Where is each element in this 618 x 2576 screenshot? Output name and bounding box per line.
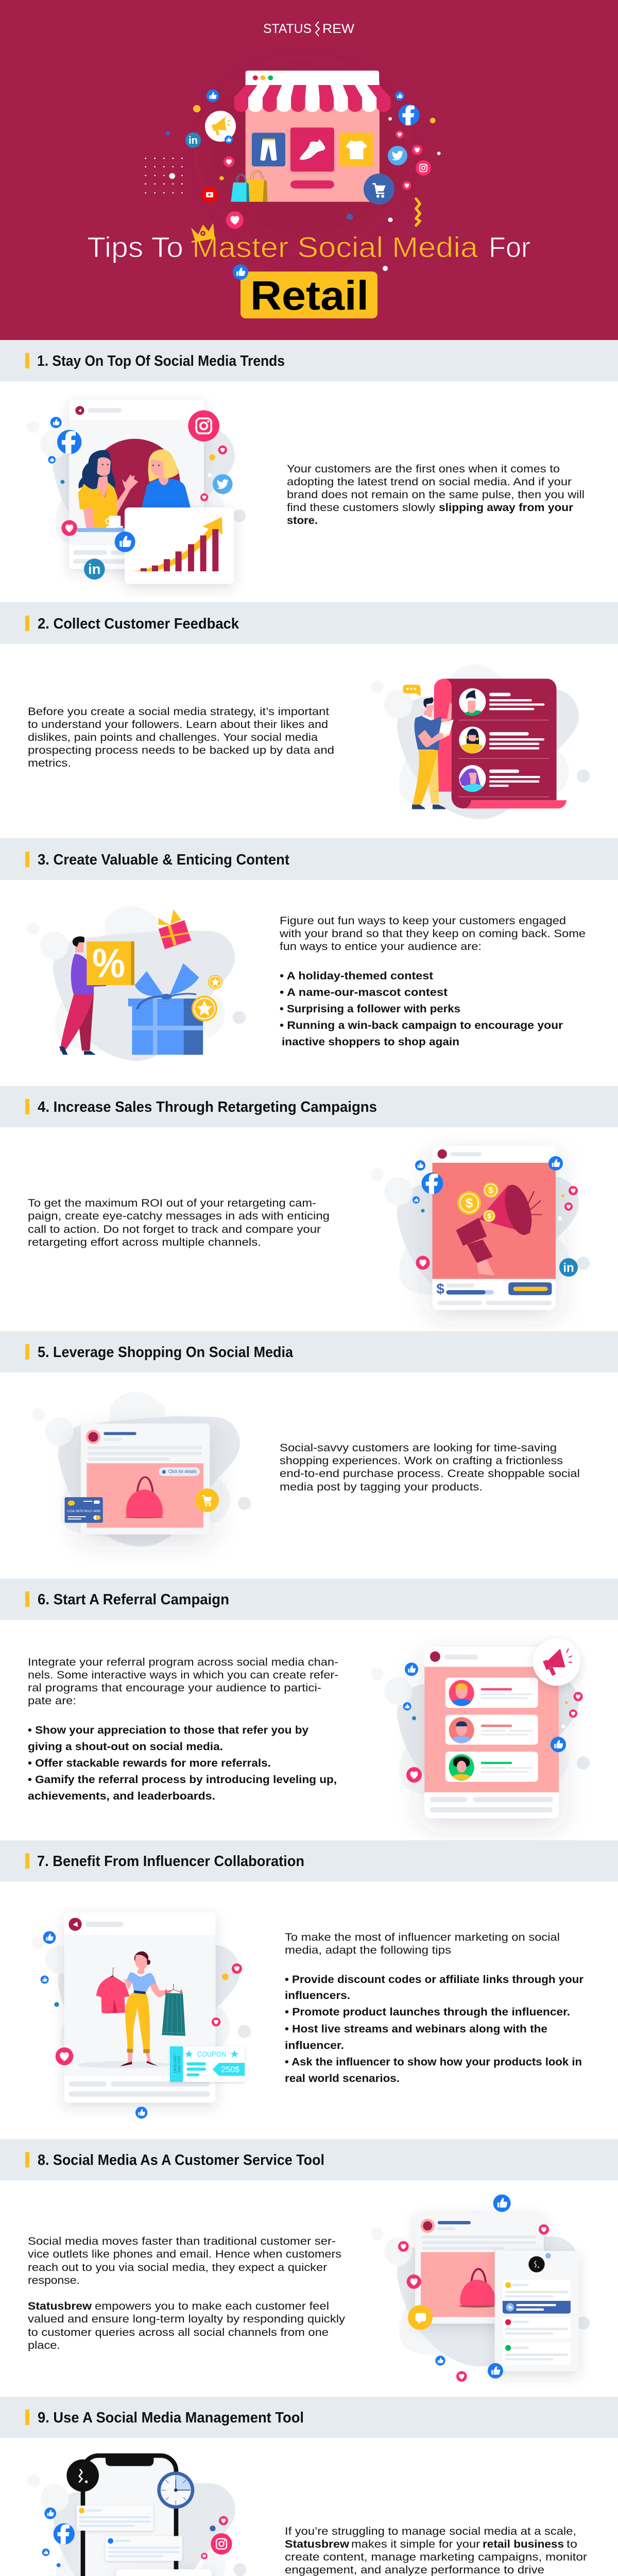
section 2 text: Before you create a social media strategy, it’s important <box>28 706 329 718</box>
illustration: section 9 blob <box>27 2459 246 2576</box>
woman right <box>142 449 191 507</box>
section 6 bullet list: achievements, and leaderboards. <box>28 1790 215 1802</box>
icon: like bottom large <box>488 2363 503 2379</box>
icon: like small <box>48 456 56 464</box>
blue dot <box>412 1716 416 1720</box>
icon: cart <box>364 174 394 205</box>
message panel 1 <box>77 2505 153 2531</box>
section 5 heading: 5. Leverage Shopping On Social Media <box>38 1344 294 1361</box>
section 7 heading: 7. Benefit From Influencer Collaboration <box>37 1853 304 1870</box>
section 2 heading: 2. Collect Customer Feedback <box>38 616 239 632</box>
yellow dot <box>565 1701 568 1704</box>
ad card <box>433 1146 556 1310</box>
percent box <box>87 941 134 985</box>
section 9 heading: 9. Use A Social Media Management Tool <box>38 2410 304 2426</box>
title: Master Social Media <box>192 231 478 263</box>
icon: facebook <box>57 430 81 454</box>
section 8 text: Social media moves faster than traditional customer ser- <box>28 2235 336 2247</box>
section 4 heading: 4. Increase Sales Through Retargeting Campaigns <box>38 1099 377 1115</box>
icon: heart right <box>219 2516 228 2526</box>
icon: facebook <box>421 1173 443 1194</box>
section 7 heading <box>0 1840 618 1882</box>
icon: facebook <box>399 104 419 126</box>
section 7 bullet list <box>285 1974 583 2084</box>
section 7 bullet list: • Host live streams and webinars along with the <box>285 2023 547 2035</box>
icon: megaphone badge <box>205 111 236 142</box>
icon: like top <box>493 2194 511 2212</box>
icon: heart large <box>56 2047 73 2065</box>
section 8 text: Statusbrew <box>28 2300 92 2312</box>
icon: like on badge <box>233 264 248 280</box>
section 1 text: brand does not remain on the same pulse, then you will <box>287 489 585 501</box>
icon: heart left large <box>407 2275 421 2289</box>
click pill <box>159 1467 200 1476</box>
section 3 heading: 3. Create Valuable & Enticing Content <box>38 852 289 868</box>
icon: heart <box>416 1256 430 1269</box>
icon: youtube <box>202 187 217 202</box>
section 1 text: adopting the latest trend on social media. And if your <box>287 476 572 488</box>
icon: linkedin <box>185 132 201 148</box>
blue dot <box>57 2563 61 2567</box>
section 9 text: If you’re struggling to manage social media at a scale, <box>285 2526 576 2537</box>
illustration: section 6 referral card <box>424 1647 559 1818</box>
icon: heart left <box>398 2241 409 2252</box>
illustration: section 1 social post and growth chart <box>48 400 234 584</box>
blue dot <box>421 1209 424 1213</box>
icon: like <box>415 1160 425 1171</box>
section 6 bullet list: • Gamify the referral process by introducing leveling up, <box>28 1774 337 1786</box>
icon: like <box>207 90 219 102</box>
illustration: section 8 blob <box>371 2212 590 2366</box>
storefront <box>145 71 441 226</box>
icon: heart bottom <box>226 211 244 229</box>
illustration: section 7 blob <box>32 1920 251 2075</box>
section 9 heading <box>0 2397 618 2438</box>
section 3 bullet list <box>280 970 563 1048</box>
product: shoe <box>290 128 334 172</box>
referral row 2 <box>445 1715 538 1744</box>
icon: heart right <box>569 1186 578 1195</box>
section 9 text <box>285 2526 587 2576</box>
icon: heart right <box>539 2224 549 2234</box>
section 3 bullet list: • Running a win-back campaign to encourage your <box>280 1020 563 1031</box>
section 8 text: empowers you to make each customer feel <box>95 2300 329 2312</box>
dot grid <box>145 158 183 193</box>
post card <box>415 2213 544 2324</box>
section 1 heading: 1. Stay On Top Of Social Media Trends <box>37 353 285 369</box>
illustration: section 2 blob <box>371 665 590 819</box>
red circle backdrop <box>89 439 180 528</box>
cup and table <box>77 516 125 532</box>
icon: dollar coin small <box>483 1210 495 1222</box>
section 4 text: call to action. Do not forget to track and compare your <box>28 1224 321 1235</box>
section 4 text <box>28 1197 330 1248</box>
dollar sign: $ <box>436 1281 444 1297</box>
section 8 text: valued and ensure long-term loyalty by responding quickly <box>28 2313 346 2325</box>
header background <box>0 0 618 340</box>
icon: twitter <box>388 146 407 165</box>
referral row 1 <box>445 1677 538 1708</box>
section 3 bullet list: inactive shoppers to shop again <box>282 1036 459 1048</box>
illustration: section 3 person with gift <box>59 909 203 1055</box>
section 7 text: To make the most of influencer marketing on social <box>285 1931 560 1943</box>
illustration: section 5 shoppable post <box>65 1423 210 1534</box>
megaphone <box>456 1183 542 1276</box>
icon: heart <box>406 1767 422 1783</box>
statusbrew badge <box>66 2460 99 2492</box>
product: t-shirt <box>340 133 373 166</box>
icon: like small <box>413 1196 420 1204</box>
illustration: section 9 phone dashboard <box>42 2455 232 2576</box>
icon: like large <box>115 532 135 552</box>
post card <box>69 400 204 569</box>
section 9 text: create content, manage marketing campaigns, monitor <box>285 2551 587 2563</box>
icon: like bottom <box>435 2355 445 2366</box>
illustration: section 7 influencer post <box>41 1912 245 2119</box>
statusbrew logo: REW <box>322 22 354 36</box>
chart card <box>125 507 234 584</box>
icon: like small <box>42 2549 49 2556</box>
teal skirt on hanger <box>162 1985 185 2036</box>
bar chart panel <box>116 2569 212 2576</box>
section 4 text: To get the maximum ROI out of your retargeting cam- <box>28 1197 316 1209</box>
illustration: section 4 ad card <box>433 1146 556 1310</box>
section 2 text <box>28 706 334 769</box>
icon: facebook <box>54 2523 75 2545</box>
person <box>59 936 107 1055</box>
post card <box>64 1912 215 2103</box>
icon: like small <box>395 91 404 100</box>
section 6 bullet list: giving a shout-out on social media. <box>28 1741 223 1753</box>
icon: like small <box>41 1975 49 1984</box>
section 7 bullet list: • Promote product launches through the influencer. <box>285 2006 570 2018</box>
section 6 text: nels. Some interactive ways in which you can create refer- <box>28 1669 338 1681</box>
coupon: 250$ <box>221 2065 239 2074</box>
section 5 text <box>280 1442 580 1493</box>
section 6 bullet list: • Show your appreciation to those that refer you by <box>28 1724 308 1736</box>
section 6 text: ral programs that encourage your audience to partici- <box>28 1682 321 1694</box>
icon: linkedin: in <box>563 1261 574 1275</box>
icon: heart right <box>218 446 227 454</box>
section 3 text: with your brand so that they keep on coming back. Some <box>279 928 586 940</box>
icon: star coin large <box>192 995 217 1021</box>
illustration: section 2 feedback scroll with person <box>403 679 566 809</box>
section 9 text: Statusbrew <box>285 2538 350 2550</box>
icon: like right <box>551 1737 566 1752</box>
blue dot right <box>210 2526 216 2531</box>
buy button <box>290 180 334 189</box>
section 9 text: makes it simple for your <box>351 2538 480 2550</box>
shopping bags <box>231 171 268 202</box>
illustration: section 6 blob <box>371 1652 590 1806</box>
credit card <box>65 1497 103 1523</box>
clock <box>157 2471 194 2509</box>
section 9 text: retail business <box>483 2538 564 2550</box>
icon: dollar coin small: $ <box>487 1212 491 1220</box>
section 7 bullet list: real world scenarios. <box>285 2073 400 2084</box>
message panel 2 <box>106 2536 182 2561</box>
section 3 heading <box>0 838 618 880</box>
section 8 text: reach out to you via social media, they expect a quicker <box>28 2262 327 2274</box>
title <box>87 231 530 263</box>
section 4 heading <box>0 1086 618 1127</box>
section 4 text: paign, create eye-catchy messages in ads with enticing <box>28 1210 330 1222</box>
section 2 text: metrics. <box>28 757 71 769</box>
phone <box>83 2455 176 2576</box>
icon: heart right <box>412 145 422 155</box>
icon: instagram <box>188 410 219 442</box>
section 2 text: prospecting process needs to be backed up by data and <box>28 744 334 756</box>
white dot <box>217 2575 220 2576</box>
section 3 text: fun ways to entice your audience are: <box>280 941 482 953</box>
section 8 text: place. <box>28 2340 60 2351</box>
title: For <box>489 231 530 263</box>
icon: instagram <box>211 2533 232 2554</box>
icon: dollar coin large: $ <box>466 1195 473 1211</box>
icon: like on megaphone <box>225 135 233 144</box>
illustration: section 8 customer service cards <box>398 2194 579 2382</box>
section 8 heading <box>0 2139 618 2180</box>
section 7 bullet list: influencer. <box>285 2040 344 2052</box>
avatar 2 <box>459 726 486 754</box>
section 8 heading: 8. Social Media As A Customer Service Tool <box>38 2152 324 2168</box>
title: Tips To <box>87 231 183 263</box>
icon: heart right lower <box>403 181 411 190</box>
illustration: section 5 blob <box>32 1392 251 1547</box>
icon: heart small <box>201 2553 208 2560</box>
section 5 text: shopping experiences. Work on crafting a frictionless <box>280 1455 563 1467</box>
section 3 text: Figure out fun ways to keep your customers engaged <box>280 915 566 927</box>
illustration: section 3 blob <box>27 906 246 1061</box>
illustration: section 4 blob <box>371 1152 590 1307</box>
section 2 text: dislikes, pain points and challenges. Your social media <box>28 732 318 743</box>
icon: chat bubble <box>408 2305 433 2330</box>
blue dot <box>54 2002 59 2007</box>
click for details label: Click for details <box>168 1469 197 1474</box>
section 7 bullet list: • Ask the influencer to show how your products look in <box>285 2056 582 2068</box>
small dots <box>166 105 441 222</box>
section 6 heading: 6. Start A Referral Campaign <box>38 1591 229 1608</box>
red shirt on hanger <box>96 1968 130 2013</box>
post card <box>81 1423 210 1534</box>
white dot <box>561 1724 565 1728</box>
white dot <box>383 266 388 271</box>
icon: like <box>44 2507 56 2519</box>
percent sign: % <box>92 940 125 986</box>
icon: heart right <box>232 1963 242 1974</box>
section 9 text: to <box>566 2538 577 2550</box>
referral row 3 <box>445 1752 538 1782</box>
section 5 text: media post by tagging your products. <box>280 1481 483 1493</box>
blue dot <box>60 480 64 484</box>
white dot <box>558 1216 562 1221</box>
icon: like <box>50 417 62 428</box>
section 6 text <box>28 1656 338 1707</box>
section 5 text: end-to-end purchase process. Create shoppable social <box>280 1468 580 1480</box>
section 1 text: find these customers slowly <box>287 502 436 514</box>
woman left <box>78 450 138 528</box>
icon: dollar coin medium <box>483 1182 499 1198</box>
section 3 bullet list: • Surprising a follower with perks <box>280 1003 460 1015</box>
icon: crown <box>191 223 215 243</box>
icon: linkedin: in <box>88 561 100 577</box>
section 7 text: media, adapt the following tips <box>285 1944 451 1956</box>
card number: 1234 5678 9012 3456 <box>67 1510 100 1513</box>
icon: heart left <box>224 157 234 167</box>
section 6 heading <box>0 1579 618 1620</box>
section 8 text: to customer queries across all social channels from one <box>28 2327 329 2338</box>
yellow dot <box>222 1974 229 1980</box>
section 2 heading <box>0 602 618 644</box>
section 7 bullet list: influencers. <box>285 1990 350 2002</box>
product: jeans <box>252 133 285 166</box>
section 1 text: Your customers are the first ones when it comes to <box>287 463 560 475</box>
coupon: COUPON <box>197 2050 226 2059</box>
large gift <box>128 963 203 1055</box>
referral card <box>424 1647 559 1818</box>
inbox card <box>495 2251 579 2371</box>
influencer woman <box>121 1952 171 2066</box>
section 5 heading <box>0 1331 618 1372</box>
section 7 text <box>285 1931 560 1956</box>
icon: cart coin <box>195 1488 219 1512</box>
section 8 text <box>28 2235 346 2351</box>
section 1 text: slipping away from your <box>439 502 573 514</box>
statusbrew logo: STATUS <box>263 22 312 36</box>
section 4 text: retargeting effort across multiple channels. <box>28 1236 261 1248</box>
person with clipboard <box>412 697 454 809</box>
icon: heart small <box>569 1709 577 1718</box>
icon: twitter <box>213 474 233 494</box>
icon: instagram <box>416 160 431 176</box>
section 9 text: engagement, and analyze performance to drive <box>285 2564 544 2576</box>
coupon <box>170 2046 245 2082</box>
small gift <box>159 909 191 949</box>
handbag <box>125 1477 164 1518</box>
icon: star coin small <box>208 975 222 989</box>
avatar 3 <box>459 765 486 792</box>
icon: like right <box>548 1156 563 1171</box>
speech bubble <box>403 685 421 697</box>
icon: heart small <box>564 1202 573 1211</box>
coupon: DISCOUNT <box>173 2056 177 2074</box>
retail badge: Retail <box>250 273 369 318</box>
icon: megaphone badge <box>533 1638 580 1686</box>
section 3 bullet list: • A holiday-themed contest <box>280 970 433 982</box>
section 1 text: store. <box>287 515 318 527</box>
section 6 bullet list <box>28 1724 337 1802</box>
section 3 bullet list: • A name-our-mascot contest <box>280 987 448 998</box>
icon: like <box>405 1663 418 1676</box>
icon: like small <box>403 1702 411 1710</box>
coupon: 25% OFF <box>177 2056 180 2073</box>
section 1 text <box>287 463 585 527</box>
section 6 text: pate are: <box>28 1695 76 1707</box>
icon: linkedin <box>559 1258 578 1277</box>
icon: heart <box>61 520 77 536</box>
illustration: section 1 blob <box>27 404 246 559</box>
yellow dot <box>210 454 215 460</box>
squiggle <box>416 199 420 226</box>
scroll <box>434 679 566 808</box>
section 3 text <box>279 915 586 953</box>
statusbrew logo <box>263 22 354 36</box>
icon: heart right <box>574 1692 583 1701</box>
section 6 bullet list: • Offer stackable rewards for more referrals. <box>28 1757 271 1769</box>
section 6 text: Integrate your referral program across social media chan- <box>28 1656 338 1668</box>
icon: heart small <box>200 494 208 501</box>
icon: linkedin: in <box>188 135 198 146</box>
icon: dollar coin medium: $ <box>488 1185 493 1195</box>
icon: heart small <box>212 2018 220 2026</box>
yellow dot <box>561 1194 564 1197</box>
icon: linkedin <box>84 558 105 580</box>
section 8 text: response. <box>28 2275 80 2286</box>
icon: heart right top <box>396 130 404 139</box>
avatar <box>86 1430 100 1444</box>
section 7 bullet list: • Provide discount codes or affiliate links through your <box>285 1974 583 1986</box>
section 5 text: Social-savvy customers are looking for time-saving <box>280 1442 557 1454</box>
section 2 text: to understand your followers. Learn about their likes and <box>28 719 328 731</box>
handbag <box>459 2269 496 2308</box>
icon: like bottom <box>135 2107 147 2119</box>
icon: dollar coin large <box>457 1191 481 1215</box>
icon: heart bottom <box>456 2371 467 2382</box>
section 1 heading <box>0 340 618 381</box>
store glow <box>206 67 402 242</box>
avatar 1 <box>459 688 486 716</box>
icon: like <box>43 1931 56 1944</box>
white dot <box>208 473 212 477</box>
section 8 text: vice outlets like phones and email. Hence when customers <box>28 2248 341 2260</box>
